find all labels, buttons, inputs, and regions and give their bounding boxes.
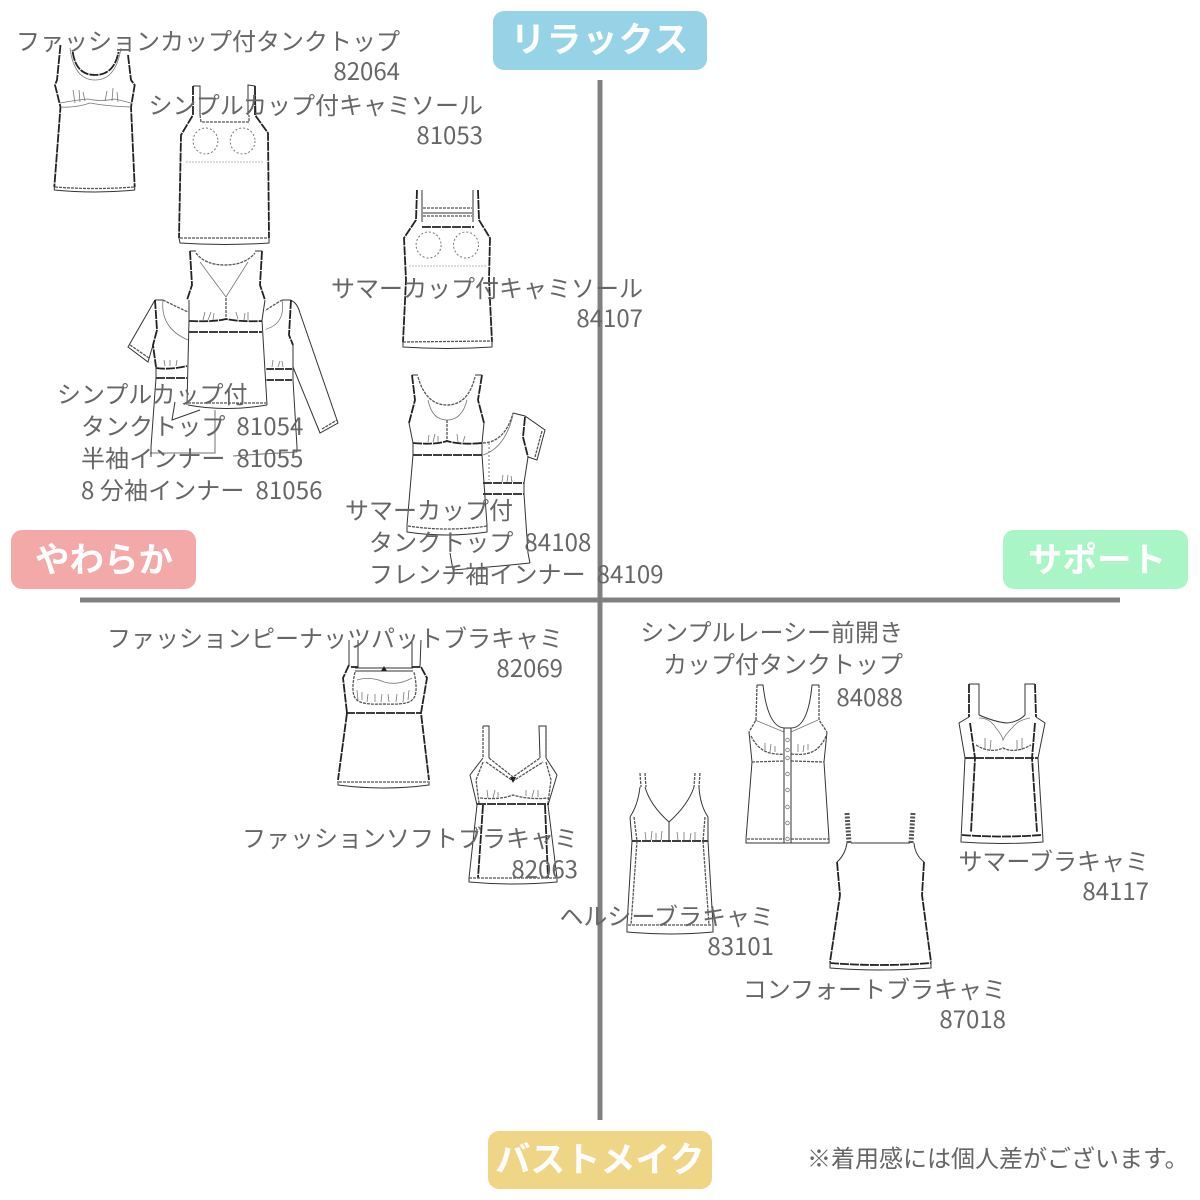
label: 84107 (331, 269, 643, 334)
garment: 84108 tank top (407, 375, 487, 535)
label: 82064 (16, 22, 400, 87)
label: 81054 81055 81056: 半袖インナー 81055 (81, 439, 303, 474)
label: 84107: サマーカップ付キャミソール (331, 269, 643, 304)
label: 84088 (640, 613, 903, 713)
label: 84088: シンプルレーシー前開き (640, 613, 903, 648)
garment: 84107 camisole (403, 190, 492, 348)
garment: 82064 tank top (54, 45, 135, 192)
label: 82069 (107, 619, 563, 684)
label: 84117: サマーブラキャミ (958, 842, 1149, 877)
label: 82064: 82064 (333, 52, 400, 87)
horizontal axis (80, 598, 1120, 602)
label: 87018: コンフォートブラキャミ (743, 970, 1006, 1005)
axis label: right: サポート (1028, 532, 1166, 582)
axis label: right (1003, 530, 1188, 589)
label: 84117 (958, 842, 1149, 907)
label: 81054 81055 81056: シンプルカップ付 (57, 375, 248, 410)
garment: 82063 soft bra camisole (469, 726, 557, 884)
garment: 87018 comfort bra camisole (830, 813, 931, 970)
label: 81054 81055 81056: 8 分袖インナー 81056 (81, 471, 323, 506)
label: 84108 84109: フレンチ袖インナー 84109 (369, 555, 664, 590)
garment: 81054 tank top (187, 251, 267, 408)
garment: 84109 french sleeve inner (450, 413, 545, 570)
footnote: ※着用感には個人差がございます。 (807, 1139, 1189, 1174)
label: 84088: カップ付タンクトップ (663, 645, 903, 680)
label: 82069: 82069 (496, 649, 563, 684)
axis label: top: リラックス (511, 12, 689, 63)
garment: 84117 summer bra camisole (959, 684, 1045, 844)
label: 82069: ファッションピーナッツパットブラキャミ (107, 619, 563, 654)
label: 84108 84109 (345, 491, 664, 590)
label: 81053: シンプルカップ付キャミソール (148, 86, 483, 121)
axis label: bottom: バストメイク (495, 1132, 705, 1183)
label: 87018 (743, 970, 1006, 1035)
garment: 81056 long sleeve inner (233, 300, 338, 456)
label: 84108 84109: サマーカップ付 (345, 491, 513, 526)
garment: 81055 short sleeve inner (128, 300, 215, 457)
label: 83101: ヘルシーブラキャミ (559, 897, 774, 932)
label: 81054 81055 81056 (57, 375, 323, 506)
vertical axis (598, 80, 602, 1120)
label: 82064: ファッションカップ付タンクトップ (16, 22, 400, 57)
label: 87018: 87018 (939, 1000, 1006, 1035)
label: 82063: ファッションソフトブラキャミ (242, 819, 578, 854)
label: 83101: 83101 (707, 927, 774, 962)
label: 81054 81055 81056: タンクトップ 81054 (81, 407, 303, 442)
label: 82063: 82063 (511, 850, 578, 885)
garment: 84088 front-open tank top (746, 685, 829, 843)
label: 84088: 84088 (836, 678, 903, 713)
garment: 82069 peanut pad camisole (338, 640, 429, 788)
label: 84117: 84117 (1082, 872, 1149, 907)
label: 84107: 84107 (576, 299, 643, 334)
label: 81053 (148, 86, 483, 151)
label: 81053: 81053 (416, 116, 483, 151)
label: 82063 (242, 819, 578, 885)
garment: 81053 camisole (179, 85, 269, 244)
axis label: left: やわらか (35, 532, 173, 582)
axis label: left (11, 530, 196, 589)
garment: 83101 healthy bra camisole (627, 773, 713, 934)
label: 83101 (559, 897, 774, 962)
label: 84108 84109: タンクトップ 84108 (369, 523, 591, 558)
